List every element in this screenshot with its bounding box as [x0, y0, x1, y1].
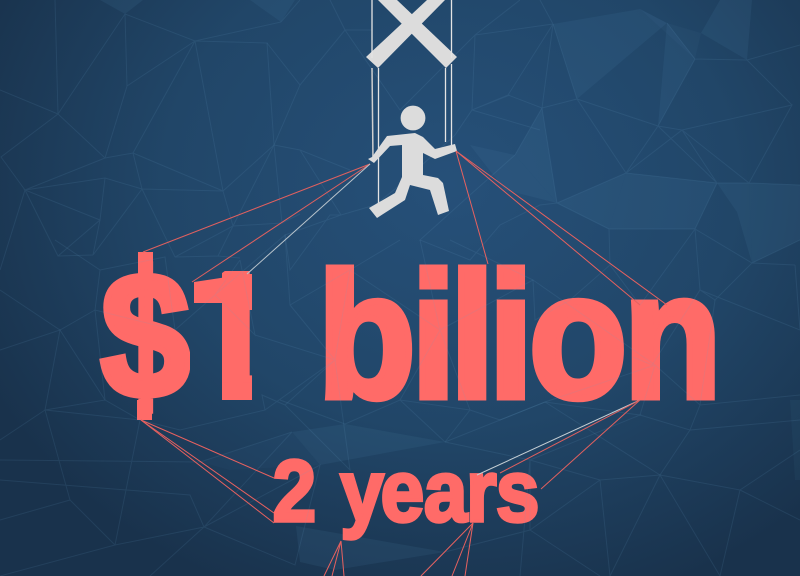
strings: below y	[324, 541, 344, 576]
dollar sign bars and numeral flag	[137, 252, 252, 420]
main figure: $1 bilion	[99, 252, 715, 420]
strings: dollar sign to 2	[141, 420, 274, 523]
strings: left hand to dollar figure	[143, 164, 370, 282]
secondary figure: 2 years: 2 years	[273, 442, 539, 540]
strings: below s	[421, 523, 473, 576]
main figure text: $1 bilion	[101, 236, 722, 435]
puppet control cross	[366, 0, 457, 68]
icon: running puppet figure	[368, 106, 457, 218]
strings: n to years	[477, 400, 640, 489]
strings: right hand to bilion	[456, 151, 667, 305]
puppet strings	[372, 0, 452, 208]
